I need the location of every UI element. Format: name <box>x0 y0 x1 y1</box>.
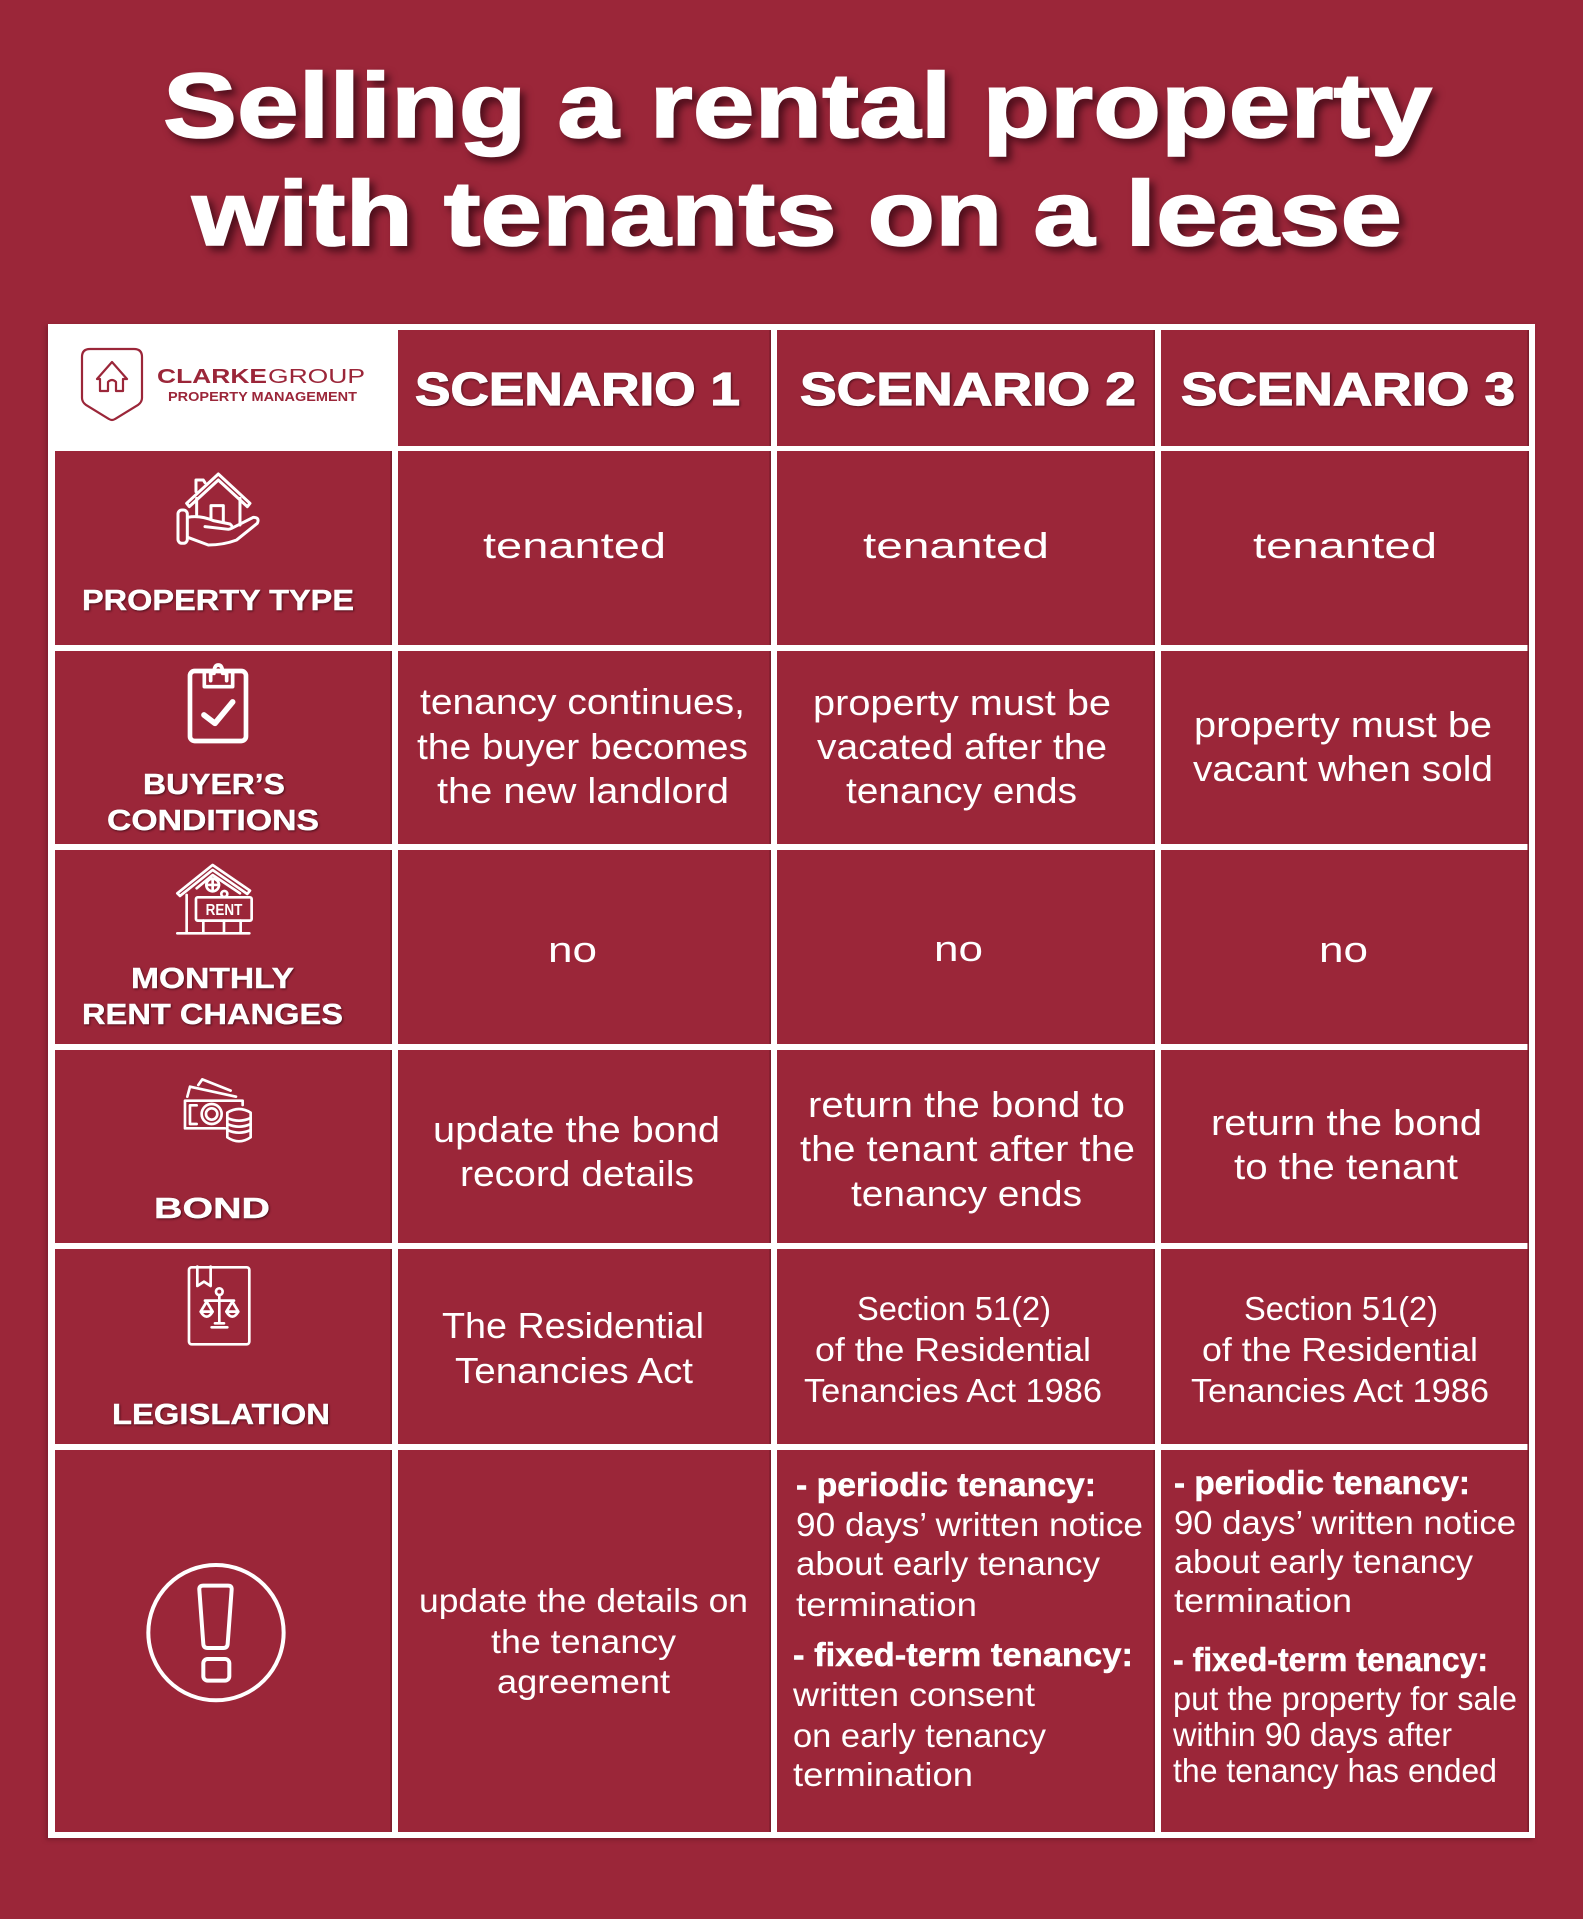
row: legislation <box>55 1249 1529 1444</box>
comparison table <box>48 324 1535 1838</box>
scenario 2 value: no <box>934 928 983 969</box>
label: legislation: LEGISLATION <box>112 1399 330 1431</box>
scenario 2 text: termination <box>793 1756 973 1793</box>
scenario 3 text: termination <box>1174 1582 1352 1619</box>
scenario 2 heading: SCENARIO 2 <box>800 363 1136 415</box>
label: buyer's conditions: BUYER’S <box>143 769 285 801</box>
icon: law book with scales <box>189 1267 249 1344</box>
scenario 3 text: - fixed-term tenancy: <box>1173 1641 1488 1678</box>
label: monthly rent changes: RENT CHANGES <box>82 999 343 1031</box>
scenario 1 value: tenanted <box>483 525 666 566</box>
scenario 2 text: about early tenancy <box>796 1545 1101 1582</box>
scenario 3 text <box>1172 1464 1517 1789</box>
scenario 2 value: tenanted <box>863 525 1049 566</box>
row: buyer's conditions <box>55 651 1529 844</box>
scenario 3 text: the tenancy has ended <box>1173 1752 1497 1789</box>
scenario 2 text <box>804 1290 1102 1409</box>
scenario 2 text: the tenant after the <box>800 1128 1135 1169</box>
label: monthly rent changes: MONTHLY <box>131 963 294 995</box>
icon: exclamation mark in circle <box>148 1565 284 1700</box>
title <box>163 55 1432 265</box>
logo: Clarke Group Property Management <box>82 349 365 420</box>
scenario 3 text: 90 days’ written notice <box>1174 1504 1516 1541</box>
row: notice requirements <box>55 1450 1529 1832</box>
logo: Clarke Group Property Management: GROUP <box>268 366 365 388</box>
scenario 2 text: Tenancies Act 1986 <box>804 1372 1102 1409</box>
scenario 3 heading: SCENARIO 3 <box>1181 363 1515 415</box>
scenario 1 text: the buyer becomes <box>417 726 748 767</box>
scenario 1 text: The Residential <box>442 1305 704 1346</box>
row: bond <box>55 1050 1529 1243</box>
scenario 3 text: put the property for sale <box>1173 1680 1517 1717</box>
scenario 3 text <box>1193 704 1493 789</box>
scenario 3 heading <box>1161 330 1529 446</box>
scenario 2 text: tenancy ends <box>851 1173 1082 1214</box>
scenario 2 text: - fixed-term tenancy: <box>793 1636 1133 1673</box>
scenario 1 text: agreement <box>497 1663 670 1700</box>
scenario 1 heading <box>398 330 771 446</box>
scenario 3 text: return the bond <box>1211 1102 1482 1143</box>
logo: Clarke Group Property Management: CLARKE <box>157 366 267 388</box>
scenario 3 value: tenanted <box>1253 525 1437 566</box>
scenario 1 text <box>433 1109 720 1194</box>
icon: clipboard with check <box>190 665 246 741</box>
logo: Clarke Group Property Management: PROPERTY MANAGEMENT <box>168 389 357 404</box>
icon: banknotes and coins <box>185 1079 251 1141</box>
scenario 2 text: termination <box>796 1586 977 1623</box>
scenario 3 text: property must be <box>1194 704 1492 745</box>
scenario 1 text: update the bond <box>433 1109 720 1150</box>
scenario 1 value: no <box>548 929 597 970</box>
scenario 2 text: of the Residential <box>815 1331 1091 1368</box>
row: monthly rent changes <box>55 850 1529 1044</box>
scenario 1 text: the new landlord <box>437 770 729 811</box>
scenario 2 text: return the bond to <box>808 1084 1125 1125</box>
scenario 2 text <box>800 1084 1135 1214</box>
label: property type: PROPERTY TYPE <box>82 585 354 617</box>
scenario 2 text: on early tenancy <box>793 1717 1047 1754</box>
scenario 3 value: no <box>1319 929 1368 970</box>
icon: house with rent sign <box>177 865 252 933</box>
title: with tenants on a lease <box>191 163 1402 265</box>
label: bond: BOND <box>154 1193 270 1225</box>
scenario 3 text <box>1211 1102 1482 1187</box>
scenario 1 text: the tenancy <box>491 1623 677 1660</box>
title: Selling a rental property <box>163 55 1432 157</box>
scenario 3 text <box>1191 1290 1489 1409</box>
scenario 2 text <box>813 682 1111 811</box>
scenario 1 text <box>417 681 748 811</box>
scenario 2 text: Section 51(2) <box>857 1290 1051 1327</box>
scenario 3 text: to the tenant <box>1234 1146 1458 1187</box>
label: monthly rent changes <box>82 963 343 1031</box>
scenario 1 text: update the details on <box>419 1582 748 1619</box>
scenario 2 text: written consent <box>792 1676 1035 1713</box>
scenario 2 text <box>792 1466 1143 1793</box>
scenario 3 text: Section 51(2) <box>1244 1290 1438 1327</box>
scenario 2 text: property must be <box>813 682 1111 723</box>
scenario 3 text: about early tenancy <box>1174 1543 1474 1580</box>
scenario 1 text: record details <box>460 1153 694 1194</box>
icon: house on hand <box>178 474 258 545</box>
scenario 1 text <box>419 1582 748 1700</box>
scenario 2 heading <box>777 330 1155 446</box>
scenario 2 text: - periodic tenancy: <box>796 1466 1096 1503</box>
scenario 3 text: within 90 days after <box>1172 1716 1452 1753</box>
row: property type <box>55 451 1529 645</box>
scenario 2 text: 90 days’ written notice <box>796 1506 1143 1543</box>
scenario 1 text <box>442 1305 704 1391</box>
scenario 2 text: vacated after the <box>817 726 1107 767</box>
scenario 3 text: Tenancies Act 1986 <box>1191 1372 1489 1409</box>
label: buyer's conditions <box>107 769 319 837</box>
scenario 3 text: vacant when sold <box>1193 748 1493 789</box>
scenario 1 heading: SCENARIO 1 <box>415 363 740 415</box>
scenario 3 text: - periodic tenancy: <box>1174 1464 1470 1501</box>
scenario 1 text: tenancy continues, <box>420 681 745 722</box>
header row <box>82 330 1529 446</box>
scenario 3 text: of the Residential <box>1202 1331 1478 1368</box>
scenario 2 text: tenancy ends <box>846 770 1077 811</box>
icon: house with rent sign: RENT <box>206 902 243 919</box>
label: buyer's conditions: CONDITIONS <box>107 805 319 837</box>
scenario 1 text: Tenancies Act <box>455 1350 693 1391</box>
